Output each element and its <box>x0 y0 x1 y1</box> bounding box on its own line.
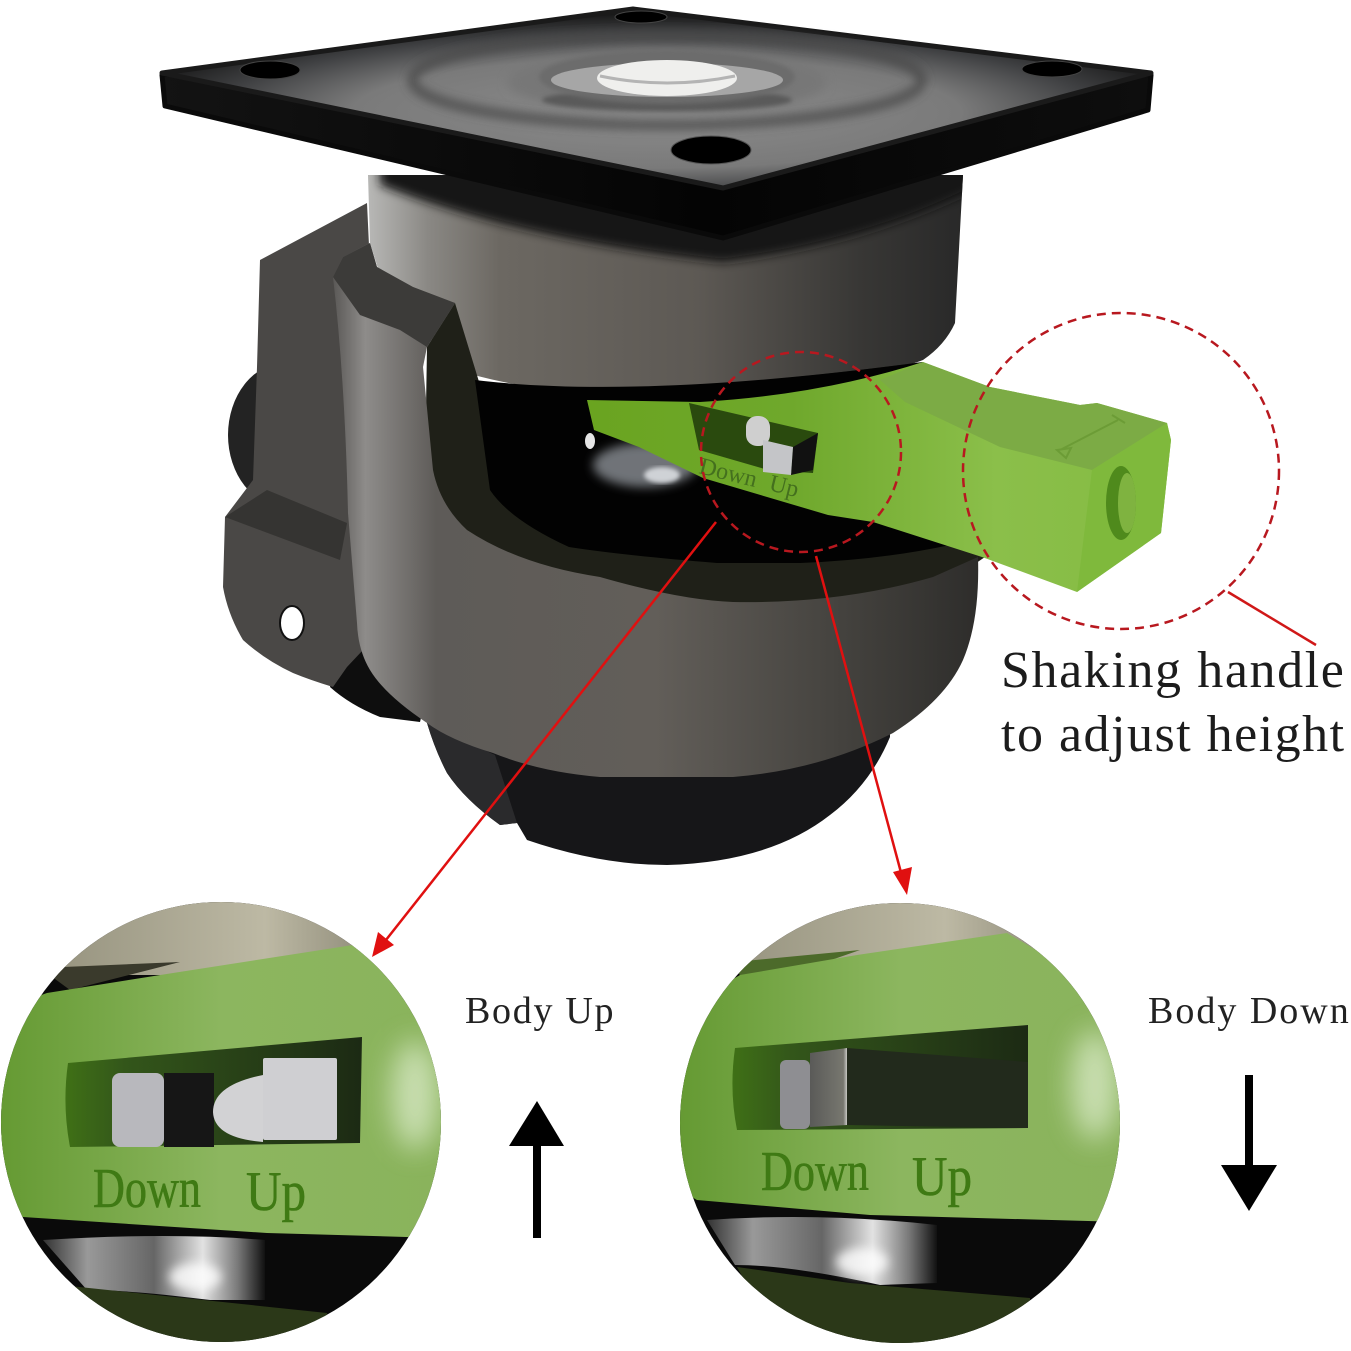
green handle <box>587 362 1171 592</box>
bracket hole <box>280 606 304 640</box>
detail circle: body down <box>680 900 1122 1345</box>
upper cylinder <box>368 175 963 387</box>
handle end face <box>1077 423 1171 592</box>
arrow: to body down view <box>816 556 912 895</box>
handle caption: Shaking handle <box>1001 642 1345 699</box>
arrow: to body up view <box>372 522 716 957</box>
caster wheel and side parts <box>228 363 890 865</box>
label: Body Up: Body Up <box>465 990 615 1032</box>
label: Down left: Down <box>93 1158 201 1220</box>
chrome bearing <box>585 433 697 487</box>
callout circle: handle <box>963 313 1279 629</box>
handle top face <box>880 362 1167 470</box>
mounting plate <box>162 9 1151 238</box>
arrow: down <box>1221 1075 1277 1211</box>
label: Up right: Up <box>912 1146 972 1208</box>
arrow: up <box>509 1101 564 1238</box>
infographic: leveling caster diagram: to adjust height <box>1001 706 1346 763</box>
green handle: Up <box>767 471 801 503</box>
label: Down right: Down <box>761 1141 869 1203</box>
label: Body Down: Body Down <box>1148 990 1351 1032</box>
slot <box>689 403 818 473</box>
callout circle: slot <box>701 352 901 552</box>
main body <box>333 243 978 777</box>
rear bracket <box>223 203 380 687</box>
handle socket <box>1106 466 1136 540</box>
label: Up left: Up <box>246 1161 306 1223</box>
slot labels: Down <box>697 454 760 493</box>
slider <box>763 433 818 475</box>
handle arrow <box>1057 415 1125 458</box>
detail circle: body up <box>0 900 442 1342</box>
cylinder top shadow <box>380 165 972 262</box>
leader line: handle <box>1228 592 1316 645</box>
dark inner cavity <box>425 303 985 616</box>
arm shoulder <box>333 243 455 347</box>
